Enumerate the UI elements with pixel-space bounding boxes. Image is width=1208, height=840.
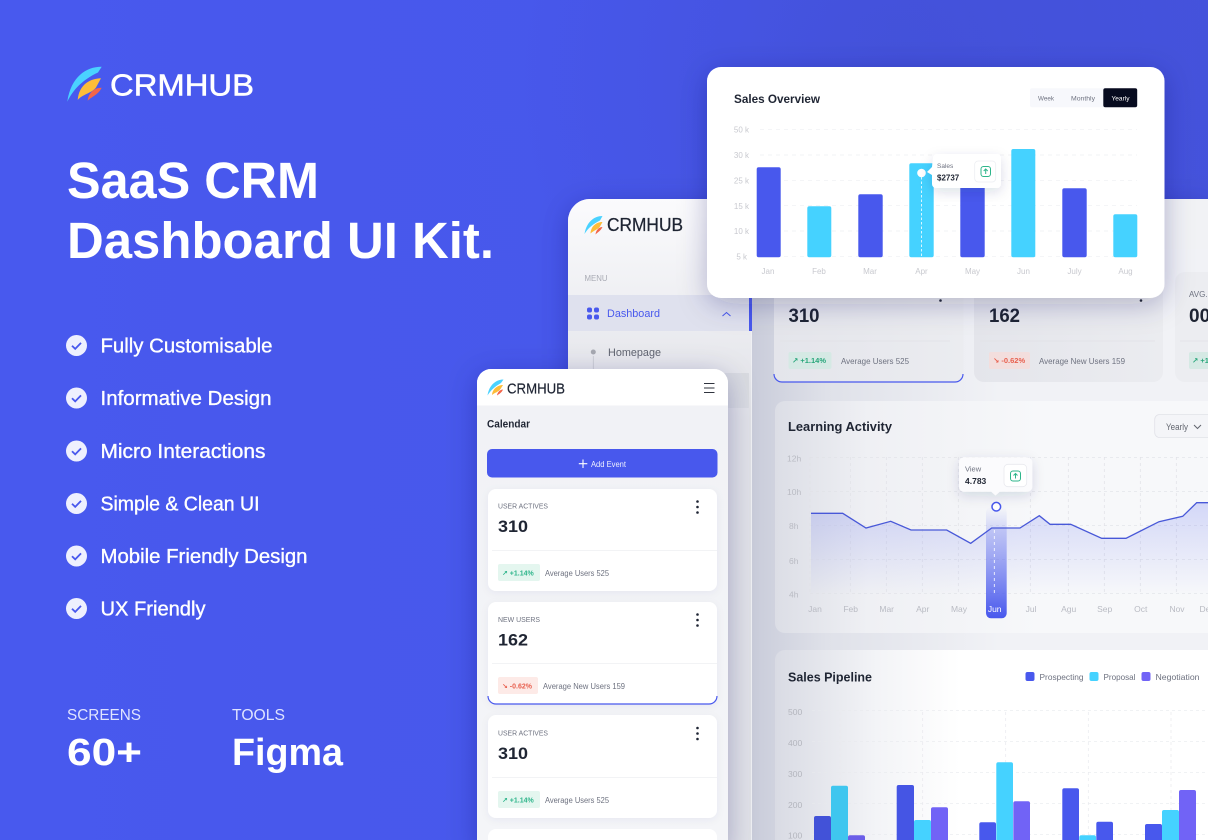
- bar chart: 5 k: [736, 252, 748, 262]
- icon: logo feather: [67, 67, 102, 102]
- heading: calendar: Calendar: [487, 418, 531, 430]
- bar chart: 300: [788, 769, 802, 779]
- legend: [1026, 672, 1200, 682]
- line chart: Jul: [1026, 604, 1037, 614]
- line chart: Feb: [843, 604, 858, 614]
- card: user actives: Average Users 525: [545, 569, 610, 578]
- stat: tools: [232, 707, 344, 774]
- mobile header: CRMHUB: [507, 380, 565, 398]
- card: user actives repeat: 310: [498, 744, 528, 763]
- bar chart: Jan: [762, 267, 774, 276]
- item: Fully Customisable: Fully Customisable: [100, 336, 272, 358]
- item: Mobile Friendly Design: Mobile Friendly Design: [100, 546, 308, 568]
- icon: green up arrow: [1010, 471, 1020, 481]
- add event button: Add Event: [591, 460, 627, 469]
- brand logo: [67, 67, 254, 102]
- bar chart: Jun: [1017, 267, 1030, 276]
- stat: tools: TOOLS: [232, 707, 285, 724]
- card: user actives repeat: ↗ +1.14%: [502, 798, 535, 804]
- tooltip: sales: Sales: [937, 163, 954, 170]
- panel: sales overview: [707, 67, 1164, 298]
- card: new users: [488, 602, 717, 704]
- panel: stat card new users: ↘ -0.62%: [993, 356, 1025, 365]
- panel: learning activity: [775, 401, 1208, 633]
- heading: Learning Activity: [788, 419, 893, 434]
- stat: screens: SCREENS: [67, 707, 141, 724]
- feature checklist: [66, 335, 308, 620]
- line chart: 12h: [787, 454, 801, 464]
- bar chart: 30 k: [734, 151, 750, 160]
- line chart: Jan: [808, 604, 822, 614]
- logo wordmark: CRMHUB: [110, 68, 254, 102]
- heading: Sales Overview: [734, 92, 821, 106]
- card: new users: 162: [498, 630, 528, 650]
- title: SaaS CRM: [67, 152, 319, 209]
- period toggle: Monthly: [1071, 96, 1096, 102]
- line chart: Sep: [1097, 604, 1113, 614]
- card: user actives: USER ACTIVES: [498, 502, 548, 510]
- item: Micro Interactions: Micro Interactions: [100, 441, 266, 463]
- bar chart: [734, 126, 1137, 276]
- add event button: [487, 449, 718, 478]
- panel: stat card users: 310: [788, 306, 820, 327]
- card: user actives repeat: [488, 715, 717, 818]
- panel: stat card users: ↗ +1.14%: [792, 356, 826, 365]
- bar chart: 15 k: [734, 202, 750, 211]
- tooltip: sales: [927, 154, 1001, 188]
- stat: tools: Figma: [232, 732, 344, 774]
- panel: sales pipeline: [775, 650, 1208, 840]
- period toggle: Week: [1038, 96, 1055, 102]
- mobile header: [477, 369, 728, 406]
- line chart: 4h: [789, 590, 799, 600]
- line chart: 8h: [789, 521, 799, 531]
- line chart: Oct: [1134, 604, 1148, 614]
- menu item: dashboard: Dashboard: [607, 308, 660, 320]
- panel: stat card users: [774, 270, 964, 382]
- bar chart: 500: [788, 707, 802, 717]
- title: [67, 152, 494, 269]
- line chart: 10h: [787, 487, 801, 497]
- period toggle: [1030, 88, 1137, 107]
- tooltip: view: 4.783: [965, 476, 987, 486]
- bar chart: 200: [788, 800, 802, 810]
- item: UX Friendly: UX Friendly: [100, 598, 206, 620]
- bar chart: [788, 707, 1208, 840]
- line chart: [787, 454, 1208, 618]
- card: new users: NEW USERS: [498, 615, 540, 624]
- legend: Negotiation: [1156, 672, 1200, 682]
- yearly dropdown: Yearly: [1166, 422, 1188, 432]
- menu item: homepage: [591, 347, 661, 372]
- line chart: May: [951, 604, 968, 614]
- card: new users: Average New Users 159: [543, 682, 626, 691]
- title: Dashboard UI Kit.: [67, 212, 494, 269]
- panel: stat card new users: 162: [989, 306, 1020, 327]
- item: Informative Design: Informative Design: [100, 388, 272, 410]
- line chart: Apr: [916, 604, 929, 614]
- card: user actives repeat: USER ACTIVES: [498, 728, 548, 738]
- panel: stat card average: AVG.: [1189, 290, 1208, 299]
- bar chart: 400: [788, 738, 802, 748]
- stat: screens: 60+: [67, 732, 142, 774]
- tooltip: sales: $2737: [937, 174, 960, 182]
- panel: desktop dashboard: [568, 199, 1208, 840]
- bar chart: Feb: [812, 267, 826, 276]
- bar chart: 25 k: [734, 176, 750, 186]
- legend: Prospecting: [1040, 672, 1084, 682]
- card: user actives: ↗ +1.14%: [502, 570, 535, 578]
- menu item: dashboard: [568, 295, 752, 331]
- bar chart: 50 k: [734, 126, 750, 134]
- line chart: Agu: [1061, 604, 1077, 614]
- panel: stat card new users: [974, 270, 1163, 382]
- line chart: Mar: [879, 604, 894, 614]
- sidebar wordmark: CRMHUB: [607, 215, 683, 235]
- item: Simple & Clean UI: Simple & Clean UI: [100, 494, 260, 516]
- menu label: MENU: [584, 274, 608, 283]
- card: user actives repeat: Average Users 525: [545, 796, 610, 805]
- menu item: homepage: Homepage: [608, 347, 661, 359]
- tooltip: view: [959, 457, 1032, 496]
- bar chart: July: [1067, 267, 1082, 276]
- bar chart: Mar: [863, 267, 877, 276]
- heading: Sales Pipeline: [788, 670, 872, 684]
- menu item: selected sub row: [568, 373, 749, 408]
- yearly dropdown: [1155, 414, 1208, 438]
- card: partially visible: [488, 829, 717, 840]
- panel: stat card users: Average Users 525: [841, 356, 909, 366]
- panel: stat card new users: Average New Users 159: [1039, 356, 1125, 366]
- tooltip: view: View: [965, 464, 982, 474]
- stat: screens: [67, 707, 142, 774]
- icon: green up arrow: [981, 166, 990, 176]
- panel: stat card average: [1175, 272, 1208, 382]
- highlighted month bar: [986, 507, 1007, 618]
- period toggle: Yearly: [1112, 96, 1130, 102]
- card: user actives: 310: [498, 517, 528, 536]
- line chart: Jun: [988, 604, 1002, 614]
- line chart: 6h: [789, 556, 799, 566]
- panel: mobile calendar: [477, 369, 728, 840]
- bar chart: 10 k: [734, 227, 750, 236]
- icon: hamburger menu: [704, 384, 714, 392]
- bar chart: Apr: [915, 267, 928, 276]
- line chart: Nov: [1169, 604, 1185, 614]
- bar chart: Aug: [1118, 267, 1133, 276]
- bar chart: May: [965, 267, 980, 276]
- card: user actives: [488, 489, 717, 591]
- icon: sidebar logo: [584, 216, 602, 234]
- legend: Proposal: [1104, 672, 1136, 682]
- card: new users: ↘ -0.62%: [502, 684, 533, 690]
- icon: mobile logo: [488, 380, 504, 396]
- panel: sidebar: [568, 199, 752, 840]
